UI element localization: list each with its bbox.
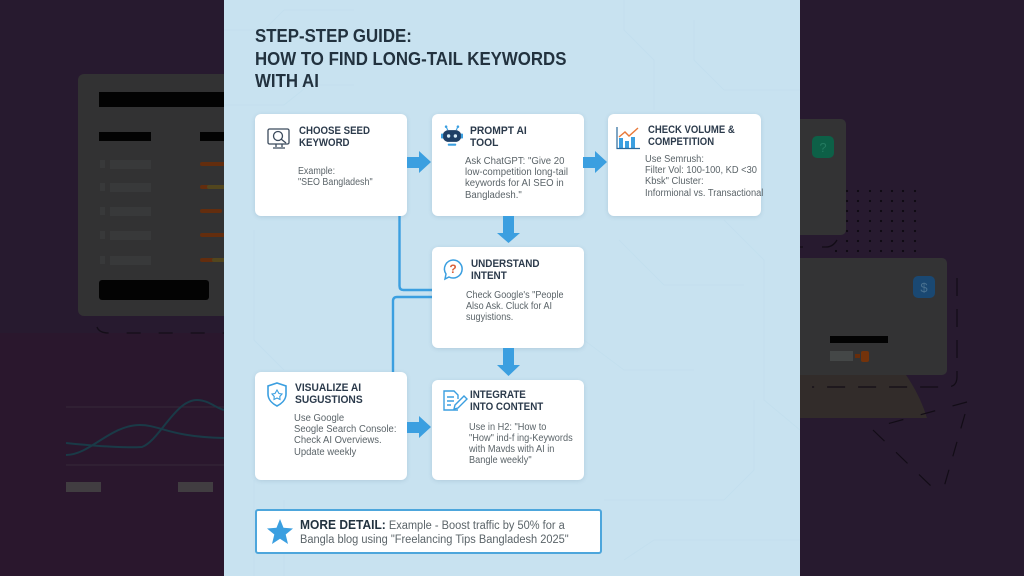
title: WITH AI xyxy=(255,70,319,91)
icon: robot xyxy=(441,125,463,146)
card: visualize AI suggestions xyxy=(255,372,407,480)
card text: keywords for AI SEO in xyxy=(465,178,564,189)
card text: with Mavds with AI in xyxy=(469,444,554,455)
card text xyxy=(469,422,573,466)
card heading: TOOL xyxy=(470,137,498,149)
left table card xyxy=(78,74,248,316)
card text: low-competition long-tail xyxy=(465,167,568,178)
card text: Seogle Search Console: xyxy=(294,424,396,435)
icon: bar chart with trend xyxy=(616,127,640,150)
card text xyxy=(645,154,763,199)
card heading xyxy=(295,382,363,406)
card heading: COMPETITION xyxy=(648,136,714,148)
arrow: prompt to check xyxy=(583,151,607,173)
icon: question bubble: ? xyxy=(449,262,457,276)
card heading: INTEGRATE xyxy=(470,389,526,401)
card text: Also Ask. Cluck for AI xyxy=(466,301,552,312)
card text xyxy=(465,156,568,201)
card: integrate into content xyxy=(432,380,584,480)
card text: Check AI Overviews. xyxy=(294,435,382,446)
callout: more detail xyxy=(255,509,602,554)
card: prompt AI tool xyxy=(432,114,584,216)
card heading: SUGUSTIONS xyxy=(295,394,363,406)
card text: Use Semrush: xyxy=(645,154,704,165)
arrow: prompt to understand xyxy=(497,216,520,243)
card text: "SEO Bangladesh" xyxy=(298,177,373,188)
callout text: MORE DETAIL: Example - Boost traffic by 50% for a xyxy=(300,518,565,532)
title: STEP-STEP GUIDE: xyxy=(255,25,412,46)
title: HOW TO FIND LONG-TAIL KEYWORDS xyxy=(255,48,566,69)
card heading: INTO CONTENT xyxy=(470,401,543,413)
connector: visualize to intent xyxy=(392,296,432,372)
icon: star xyxy=(267,519,293,544)
card text xyxy=(298,166,373,188)
card heading: CHECK VOLUME & xyxy=(648,124,735,136)
card text: "How" ind-f ing-Keywords xyxy=(469,433,573,444)
card text: Ask ChatGPT: "Give 20 xyxy=(465,156,564,167)
icon: shield xyxy=(267,382,287,407)
arrow: visualize to integrate xyxy=(407,416,431,438)
left dashed trail xyxy=(97,327,224,333)
card text: Informional vs. Transactional xyxy=(645,188,763,199)
card text: Example: xyxy=(298,166,335,177)
card text xyxy=(294,413,396,458)
card heading: PROMPT AI xyxy=(470,125,527,137)
left line chart xyxy=(66,400,224,492)
card: choose seed keyword xyxy=(255,114,407,216)
card heading: INTENT xyxy=(471,270,507,282)
card text: Use Google xyxy=(294,413,344,424)
icon: monitor search xyxy=(267,128,290,149)
title xyxy=(255,25,566,91)
card text: Bangle weekly" xyxy=(469,455,532,466)
card heading: CHOOSE SEED xyxy=(299,125,370,137)
card text: Filter Vol: 100-100, KD <30 xyxy=(645,165,757,176)
arrow: seed to prompt xyxy=(407,151,431,173)
card text: sugyistions. xyxy=(466,312,513,323)
right question card: ? xyxy=(819,140,827,155)
card heading: UNDERSTAND xyxy=(471,258,540,270)
card: understand intent xyxy=(432,247,584,348)
arrow: understand to integrate xyxy=(497,348,520,376)
card heading: VISUALIZE AI xyxy=(295,382,361,394)
right price card xyxy=(760,258,947,375)
icon: question bubble xyxy=(444,259,463,280)
panel: step-by-step guide xyxy=(224,0,800,576)
right price card: $ xyxy=(920,280,928,295)
right question card xyxy=(760,119,846,247)
card text: Use in H2: "How to xyxy=(469,422,546,432)
card text: Kbsk" Cluster: xyxy=(645,176,704,187)
connector: seed keyword to intent xyxy=(398,216,432,292)
card heading xyxy=(471,258,540,282)
circuit background pattern xyxy=(224,0,800,576)
card text: Bangladesh." xyxy=(465,190,522,201)
card heading xyxy=(299,125,370,149)
callout text: Bangla blog using "Freelancing Tips Bangladesh 2025" xyxy=(300,534,569,546)
callout text xyxy=(300,518,569,546)
card: check volume and competition xyxy=(608,114,761,216)
icon: document with pencil xyxy=(443,390,468,411)
card heading xyxy=(648,124,735,148)
card heading xyxy=(470,125,527,149)
right dot grid xyxy=(835,190,916,252)
right dashed lines xyxy=(812,278,967,494)
card heading: KEYWORD xyxy=(299,137,350,149)
card heading xyxy=(470,389,544,413)
right trapezoid stand xyxy=(760,375,927,418)
card text: Update weekly xyxy=(294,447,356,458)
card text xyxy=(466,290,564,323)
card text: Check Google's "People xyxy=(466,290,564,301)
